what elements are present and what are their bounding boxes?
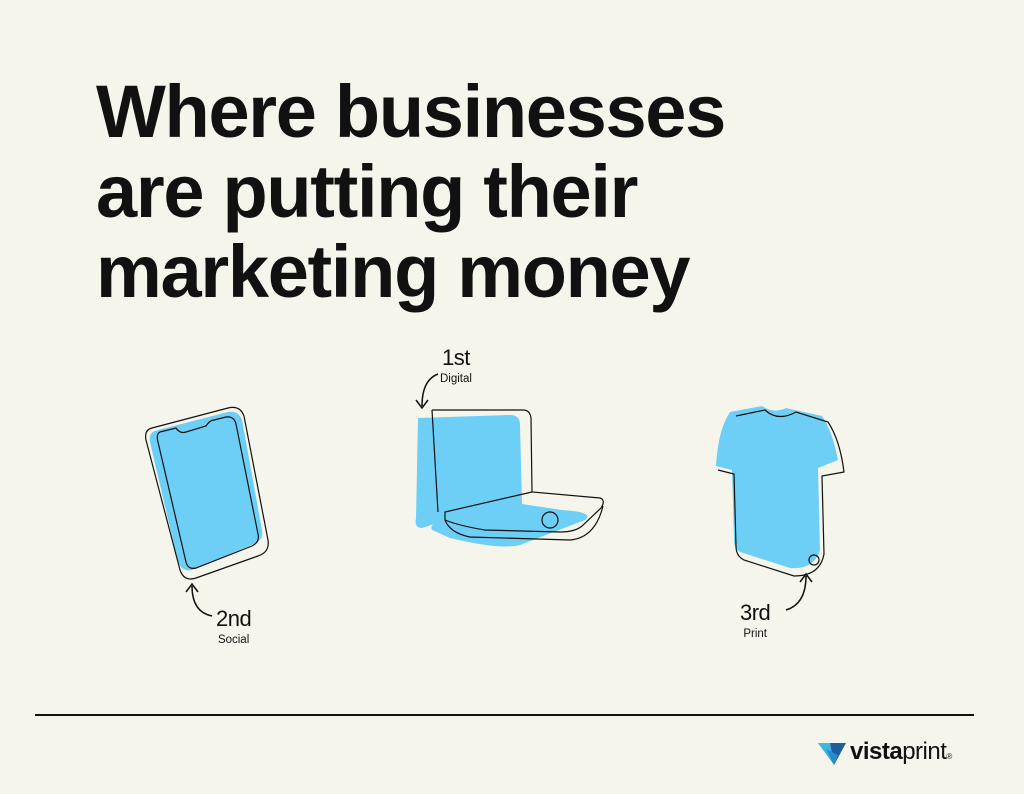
- title: [96, 70, 725, 313]
- label: 1st Digital: [440, 345, 472, 385]
- label: 2nd Social: [216, 606, 251, 646]
- label: 3rd Print: [740, 600, 770, 640]
- arrow: to t-shirt: [786, 572, 812, 611]
- arrow: to phone: [186, 582, 212, 617]
- label: 1st Digital: Digital: [440, 373, 472, 385]
- arrow: to laptop: [416, 373, 438, 410]
- label: 2nd Social: Social: [218, 634, 249, 646]
- logo: vistaprint: vistaprint®: [850, 738, 952, 765]
- label: 1st Digital: 1st: [442, 345, 470, 370]
- illustration: t-shirt: [716, 406, 845, 577]
- divider: [35, 714, 974, 716]
- label: 3rd Print: Print: [743, 628, 767, 640]
- label: 2nd Social: 2nd: [216, 606, 251, 631]
- illustration: laptop: [416, 409, 604, 546]
- title: Where businesses: [96, 70, 725, 153]
- label: 3rd Print: 3rd: [740, 600, 770, 625]
- title: are putting their: [96, 150, 637, 233]
- illustration: phone: [145, 406, 269, 580]
- title: marketing money: [96, 230, 689, 313]
